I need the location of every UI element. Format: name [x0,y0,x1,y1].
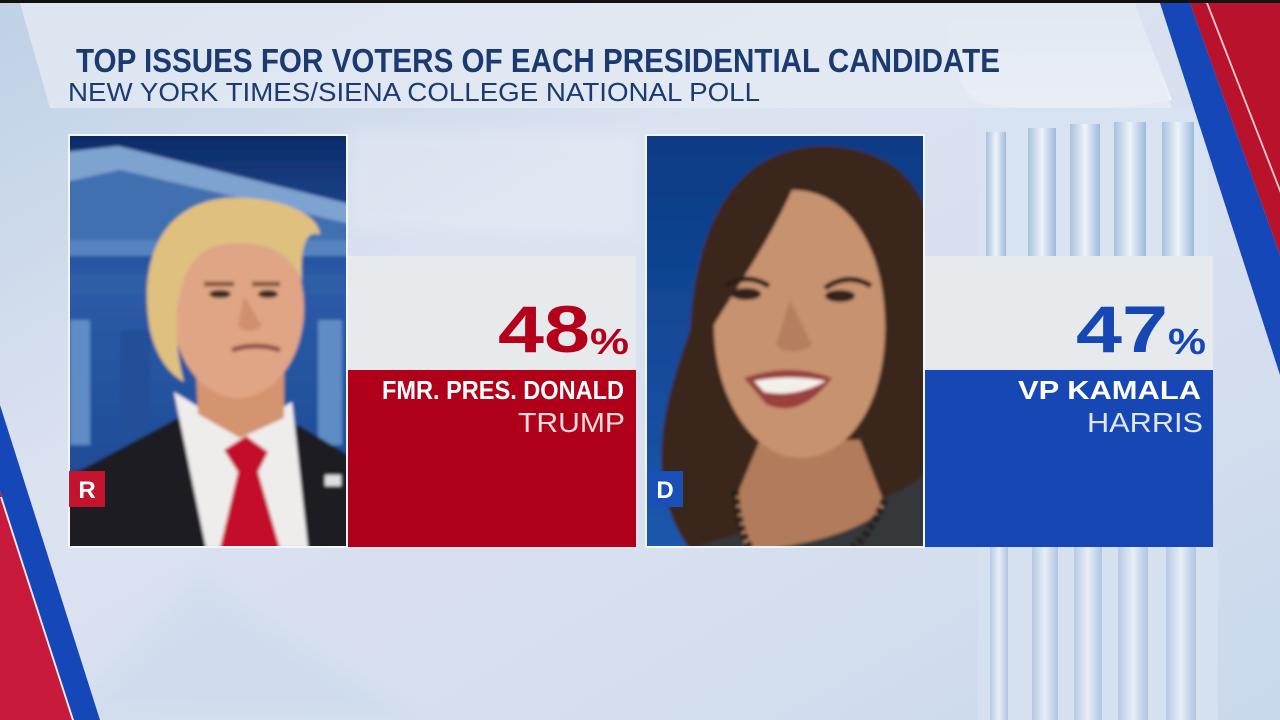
header band [20,3,1172,108]
panel: Harris [643,132,1213,550]
name box: Trump: FMR. PRES. DONALD [382,375,624,405]
badge: D: D [656,477,674,504]
name box: Harris: HARRIS [1087,407,1203,438]
decorative column [947,3,1218,720]
name box: Trump: TRUMP [518,407,625,438]
top-right stripes [1160,3,1280,375]
title: TOP ISSUES FOR VOTERS OF EACH PRESIDENTIAL CANDIDATE [76,42,1000,79]
badge: R [69,471,105,507]
badge: R: R [78,477,96,504]
percentage box: 47%: % [1168,321,1206,362]
percentage box: 48% [348,256,636,370]
percentage box: 48%: 48 [498,292,590,366]
photo: Kamala Harris [643,132,930,550]
name box: Harris: VP KAMALA [1018,375,1201,405]
percentage box: 47%: 47 [1076,292,1168,366]
name box: Harris [925,370,1213,547]
percentage box: 47% [925,256,1213,370]
photo: Donald Trump [66,132,350,550]
badge: D [647,471,683,507]
name box: Trump [348,370,636,547]
subtitle: NEW YORK TIMES/SIENA COLLEGE NATIONAL POLL [68,77,760,107]
panel: Trump [66,132,636,550]
percentage box: 48%: % [590,321,629,362]
bottom-left stripes [0,405,100,720]
